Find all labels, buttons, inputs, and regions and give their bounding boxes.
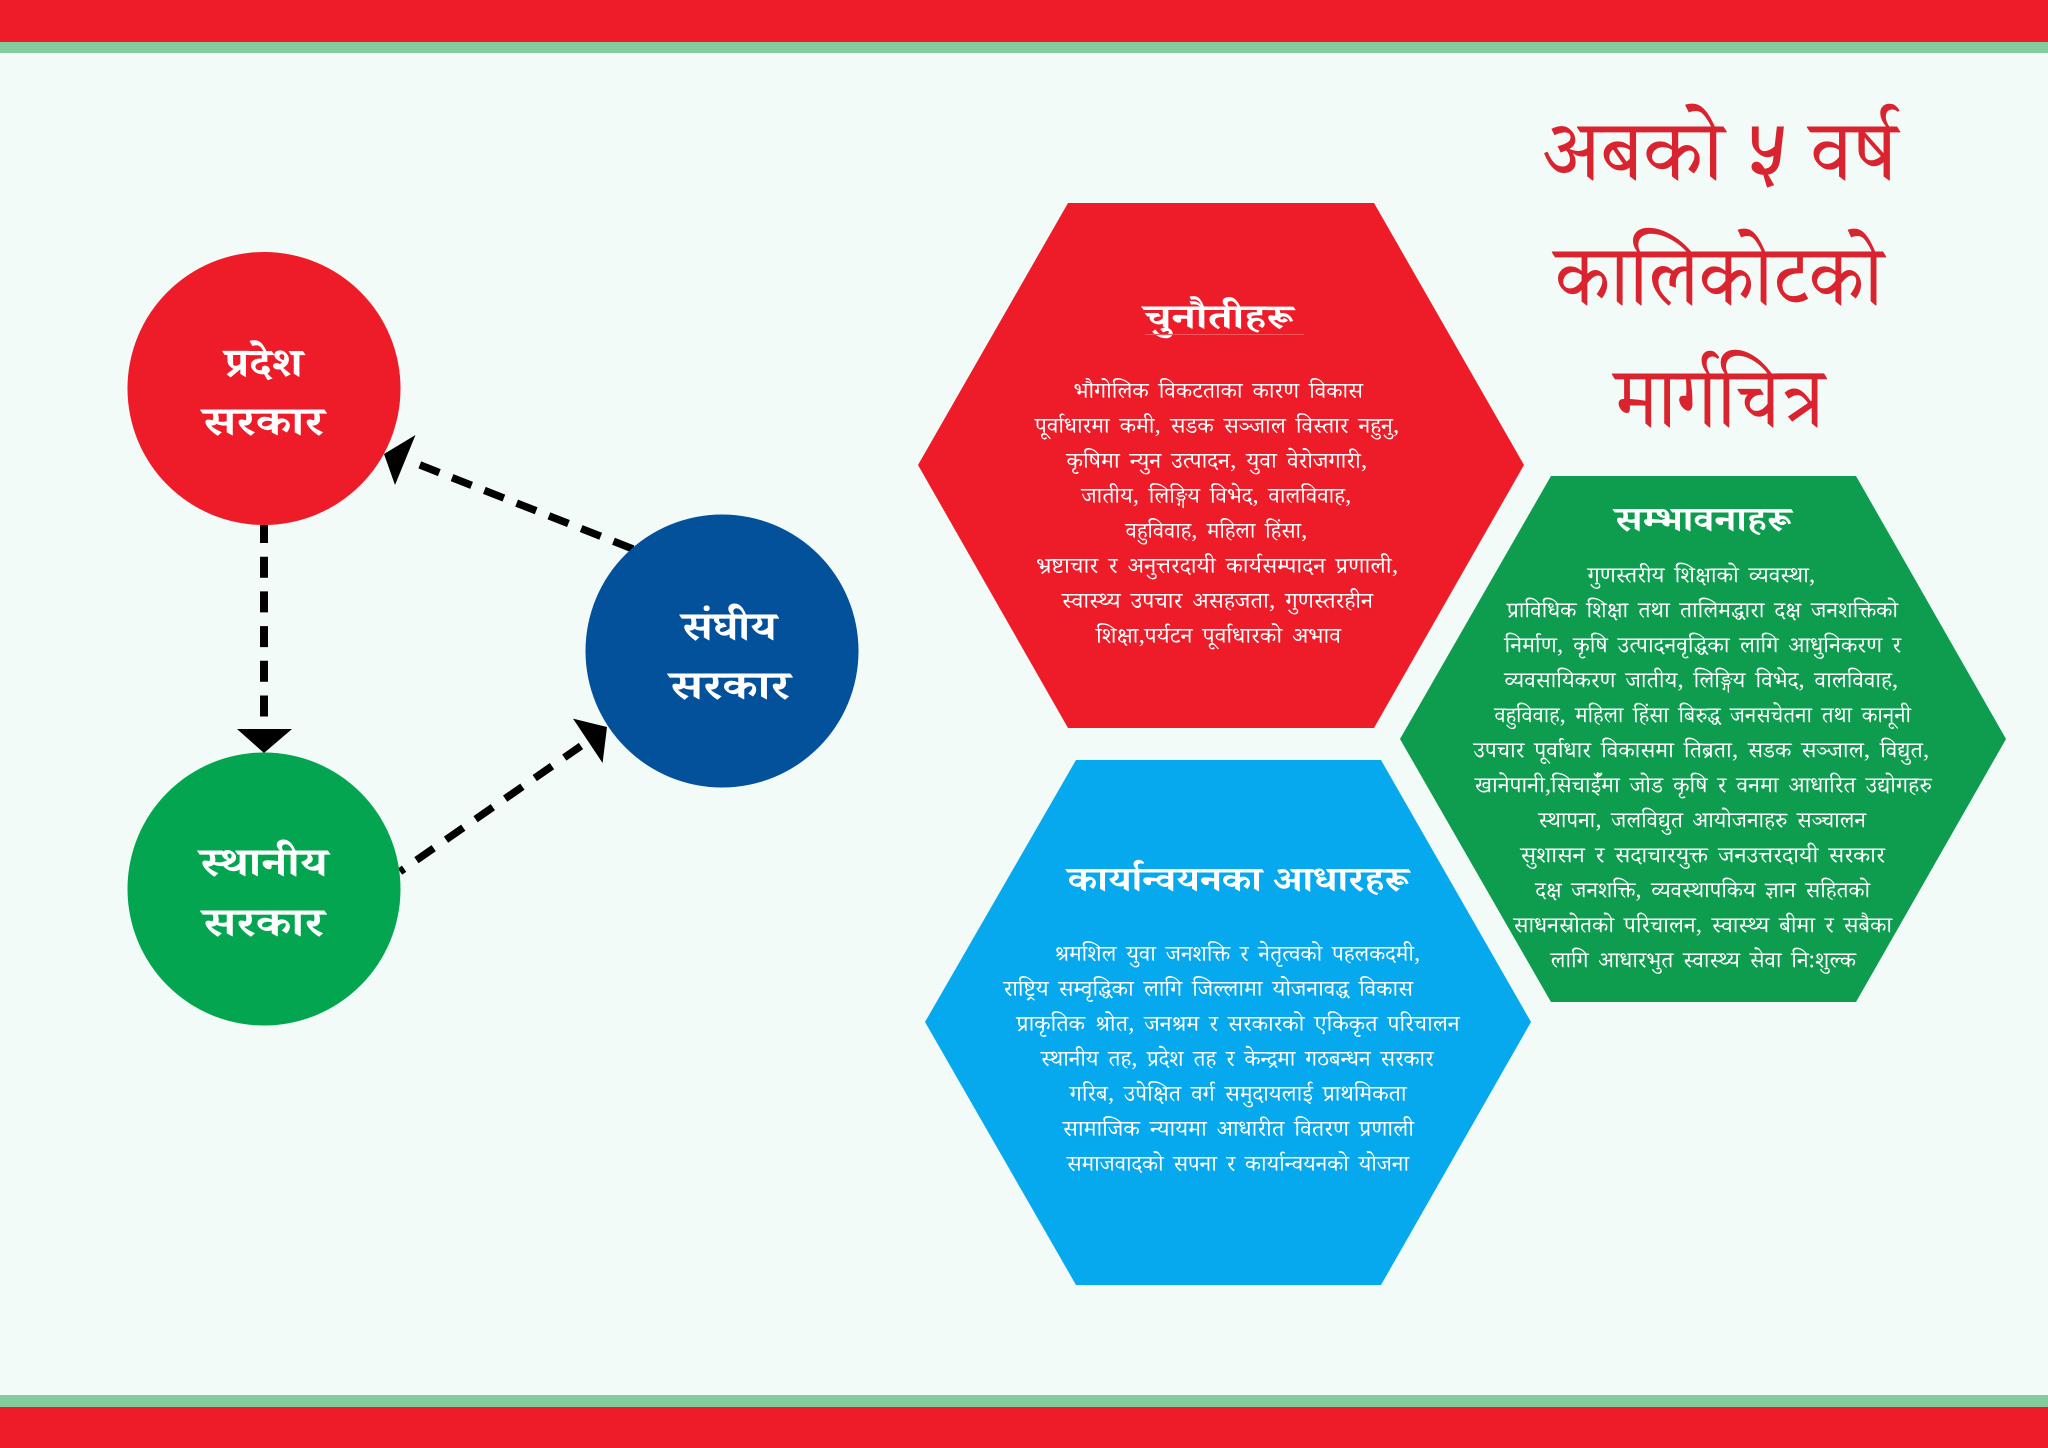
panel: possibilities hexagon bbox=[1400, 476, 2006, 1002]
text block: implementation foundations: गरिब, उपेक्षित वर्ग समुदायलाई प्राथमिकता bbox=[1069, 1080, 1408, 1115]
text block: implementation foundations: सामाजिक न्यायमा आधारीत वितरण प्रणाली bbox=[1062, 1116, 1416, 1150]
heading: challenges: चुनौतीहरू bbox=[1140, 296, 1296, 350]
text block: possibilities: स्थापना, जलविद्युत आयोजनाहरु सञ्चालन bbox=[1538, 808, 1868, 842]
text block: challenges: कृषिमा न्युन उत्पादन, युवा वेरोजगारी, bbox=[1065, 447, 1367, 482]
text block: possibilities: दक्ष जनशक्ति, व्यवस्थापकिय ज्ञान सहितको bbox=[1534, 878, 1872, 912]
text block: challenges: भौगोलिक विकटताका कारण विकास bbox=[1074, 378, 1365, 412]
text block: possibilities: निर्माण, कृषि उत्पादनवृद्धिका लागि आधुनिकरण र bbox=[1503, 632, 1903, 666]
text block: implementation foundations: समाजवादको सपना र कार्यान्वयनको योजना bbox=[1066, 1151, 1411, 1185]
title bbox=[1543, 100, 1901, 481]
text block: possibilities: साधनस्रोतको परिचालन, स्वास्थ्य बीमा र सबैका bbox=[1513, 912, 1894, 946]
text block: implementation foundations: स्थानीय तह, प्रदेश तह र केन्द्रमा गठबन्धन सरकार bbox=[1040, 1045, 1435, 1080]
circle: local government bbox=[128, 752, 400, 1026]
title: मार्गचित्र bbox=[1611, 347, 1827, 481]
text block: possibilities: सुशासन र सदाचारयुक्त जनउत्तरदायी सरकार bbox=[1520, 842, 1887, 876]
text block: implementation foundations bbox=[1003, 940, 1461, 1185]
text block: challenges: भ्रष्टाचार र अनुत्तरदायी कार्यसम्पादन प्रणाली, bbox=[1036, 553, 1398, 587]
text block: implementation foundations: राष्ट्रिय सम्वृद्धिका लागि जिल्लामा योजनावद्ध विकास bbox=[1003, 976, 1415, 1010]
text block: challenges: वहुविवाह, महिला हिंसा, bbox=[1125, 518, 1307, 552]
panel: implementation foundations hexagon bbox=[925, 760, 1531, 1285]
arrow: federal to provincial government bbox=[384, 435, 633, 549]
circle: federal government: सरकार bbox=[667, 661, 794, 725]
text block: possibilities: वहुविवाह, महिला हिंसा बिरुद्ध जनसचेतना तथा कानूनी bbox=[1493, 702, 1913, 736]
text block: implementation foundations: श्रमशिल युवा जनशक्ति र नेतृत्वको पहलकदमी, bbox=[1055, 940, 1420, 975]
bottom band bbox=[0, 1395, 2048, 1448]
text block: possibilities: लागि आधारभुत स्वास्थ्य सेवा नि:शुल्क bbox=[1550, 946, 1857, 982]
text block: possibilities: गुणस्तरीय शिक्षाको व्यवस्था, bbox=[1587, 562, 1815, 596]
text block: possibilities: खानेपानी,सिचाईँमा जोड कृषि र वनमा आधारित उद्योगहरु bbox=[1474, 772, 1933, 806]
arrow: local to federal government bbox=[400, 719, 607, 872]
text block: challenges bbox=[1034, 378, 1399, 657]
circle: local government: सरकार bbox=[199, 898, 328, 962]
text block: challenges: पूर्वाधारमा कमी, सडक सञ्जाल विस्तार नहुनु, bbox=[1034, 413, 1399, 447]
top band bbox=[0, 0, 2048, 53]
circle: local government: स्थानीय bbox=[197, 838, 330, 902]
text block: possibilities: प्राविधिक शिक्षा तथा तालिमद्धारा दक्ष जनशक्तिको bbox=[1506, 598, 1900, 632]
text block: challenges: स्वास्थ्य उपचार असहजता, गुणस्तरहीन bbox=[1061, 588, 1375, 622]
text block: possibilities bbox=[1473, 562, 1933, 982]
heading: implementation foundations: कार्यान्वयनका आधारहरू bbox=[1064, 858, 1411, 913]
circle: federal government: संघीय bbox=[679, 602, 779, 666]
circle: provincial government: प्रदेश bbox=[222, 338, 305, 402]
circle: provincial government bbox=[128, 252, 400, 525]
text block: possibilities: व्यवसायिकरण जातीय, लिङ्गिय विभेद, वालविवाह, bbox=[1503, 666, 1898, 702]
text block: implementation foundations: प्राकृतिक श्रोत, जनश्रम र सरकारको एकिकृत परिचालन bbox=[1016, 1011, 1461, 1045]
text block: challenges: शिक्षा,पर्यटन पूर्वाधारको अभाव bbox=[1095, 623, 1342, 657]
text block: possibilities: उपचार पूर्वाधार विकासमा तिब्रता, सडक सञ्जाल, विद्युत, bbox=[1473, 737, 1929, 772]
heading: possibilities: सम्भावनाहरू bbox=[1612, 498, 1794, 553]
circle: provincial government: सरकार bbox=[199, 397, 328, 461]
arrow: provincial to local government bbox=[237, 525, 292, 753]
title: अबको ५ वर्ष bbox=[1543, 100, 1901, 234]
panel: challenges hexagon bbox=[918, 203, 1524, 728]
circle: federal government bbox=[586, 514, 858, 788]
title: कालिकोटको bbox=[1551, 225, 1886, 359]
text block: challenges: जातीय, लिङ्गिय विभेद, वालविवाह, bbox=[1080, 482, 1351, 517]
